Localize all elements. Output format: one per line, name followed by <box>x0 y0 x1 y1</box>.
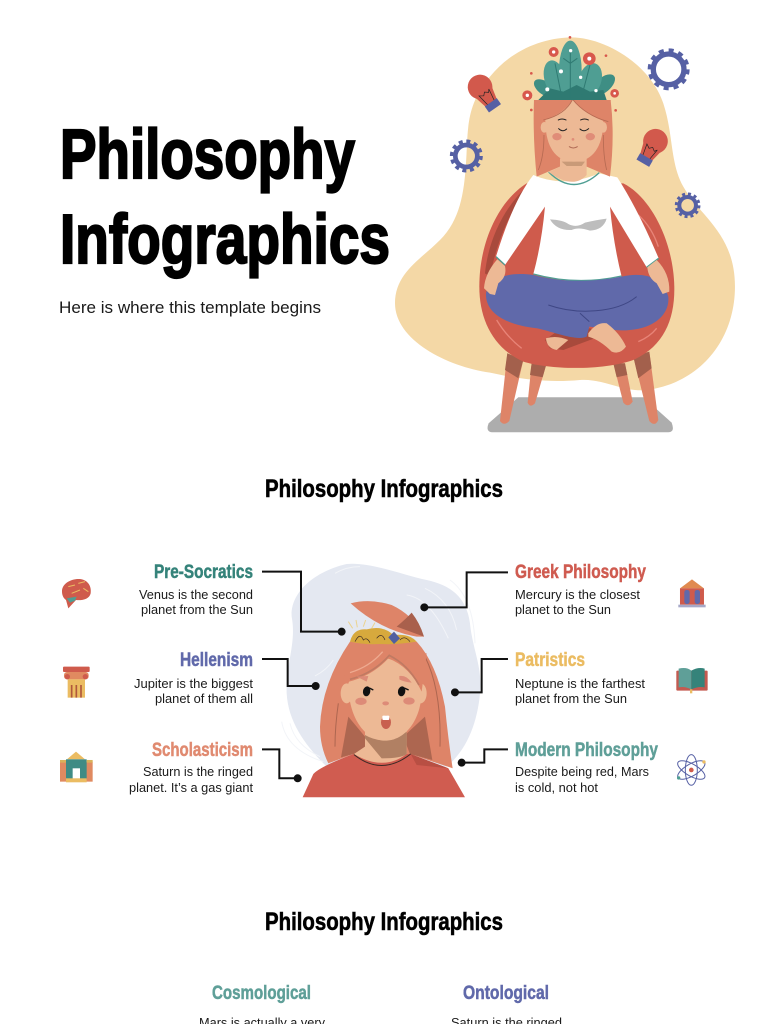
pale blob background <box>287 564 480 767</box>
item: Cosmological <box>199 982 326 1024</box>
swoosh lines <box>282 567 475 762</box>
face <box>545 99 603 162</box>
illustration: girl with open head <box>282 564 480 797</box>
flower centres <box>526 50 616 97</box>
item: Patristics <box>515 649 646 706</box>
hands <box>484 259 669 295</box>
item: Greek Philosophy: planet to the Sun <box>515 603 611 617</box>
icon: light bulb right <box>632 124 672 169</box>
eyes, nose, mouth <box>355 676 415 729</box>
icon: light bulb left <box>463 70 505 115</box>
facial features <box>552 119 595 148</box>
icon: column <box>63 667 90 698</box>
connector: Pre-Socratics <box>262 572 345 635</box>
item: Modern Philosophy: Modern Philosophy <box>515 739 658 761</box>
hair <box>320 642 453 768</box>
neck <box>549 158 587 182</box>
open skull with bulbs <box>348 620 417 644</box>
face <box>348 658 422 741</box>
yellow blob background <box>395 37 735 390</box>
chair seat <box>479 183 674 368</box>
connector: Greek Philosophy <box>421 572 508 610</box>
icon: greek temple <box>678 579 706 607</box>
connector: Hellenism <box>262 659 319 689</box>
item: Greek Philosophy: Greek Philosophy <box>515 561 646 583</box>
section heading 1: Philosophy Infographics <box>265 475 503 503</box>
shirt shadow <box>411 754 448 768</box>
shirt <box>303 754 465 797</box>
connector: Patristics <box>452 659 508 695</box>
item: Cosmological: Cosmological <box>212 982 311 1004</box>
icon: gear left <box>452 141 481 171</box>
item: Greek Philosophy <box>515 561 646 617</box>
icon: atom <box>675 755 708 785</box>
trousers <box>486 274 668 338</box>
item: Ontological <box>451 982 562 1024</box>
hair strands <box>335 657 440 747</box>
item: Ontological: Ontological <box>463 982 549 1004</box>
item: Greek Philosophy: Mercury is the closest <box>515 588 641 602</box>
title: Infographics <box>60 200 390 278</box>
item: Hellenism: Hellenism <box>180 649 253 671</box>
subtitle: Here is where this template begins <box>59 299 321 317</box>
feet <box>546 323 626 353</box>
fringe <box>342 650 427 692</box>
icon: brain <box>62 579 91 608</box>
illustration: meditating woman on chair <box>395 36 735 432</box>
item: Scholasticism: planet. It’s a gas giant <box>129 781 254 795</box>
item: Hellenism <box>134 649 254 706</box>
connector: Modern Philosophy <box>459 749 508 766</box>
chair shading <box>485 190 603 350</box>
item: Pre-Socratics: Pre-Socratics <box>154 561 253 583</box>
item: Scholasticism: Scholasticism <box>152 739 253 761</box>
title <box>60 115 390 278</box>
item: Patristics: planet from the Sun <box>515 692 627 706</box>
sweater <box>496 173 659 281</box>
item: Modern Philosophy <box>515 739 658 795</box>
item: Patristics: Neptune is the farthest <box>515 677 646 691</box>
section heading 2: Philosophy Infographics <box>265 908 503 936</box>
item: Modern Philosophy: is cold, not hot <box>515 781 599 795</box>
ears <box>341 683 427 703</box>
item: Scholasticism: Saturn is the ringed <box>143 765 253 779</box>
title: Philosophy <box>60 115 355 193</box>
flowers <box>522 36 619 112</box>
item: Pre-Socratics <box>139 561 253 617</box>
item: Scholasticism <box>129 739 254 795</box>
plant crown <box>531 41 619 101</box>
item: Modern Philosophy: Despite being red, Mars <box>515 765 649 779</box>
connector: Scholasticism <box>262 749 301 781</box>
chair legs <box>500 352 658 424</box>
neck <box>354 727 407 763</box>
sweater trim <box>496 172 659 281</box>
item: Pre-Socratics: planet from the Sun <box>141 603 253 617</box>
item: Hellenism: Jupiter is the biggest <box>134 677 254 691</box>
icon: open book <box>676 668 708 693</box>
item: Hellenism: planet of them all <box>155 692 253 706</box>
icon: gear large <box>650 50 688 88</box>
item: Pre-Socratics: Venus is the second <box>139 588 253 602</box>
chair highlights <box>497 215 658 348</box>
icon: gear right <box>676 194 699 217</box>
hair <box>534 100 613 177</box>
hair shadows <box>341 717 432 760</box>
hair flap lid <box>351 601 424 637</box>
item: Patristics: Patristics <box>515 649 585 671</box>
icon: temple building <box>60 752 93 782</box>
fringe <box>537 99 611 123</box>
connector lines <box>262 572 508 781</box>
collar line <box>354 754 411 765</box>
sweater shadow <box>550 219 607 231</box>
floor shadow <box>488 397 673 432</box>
